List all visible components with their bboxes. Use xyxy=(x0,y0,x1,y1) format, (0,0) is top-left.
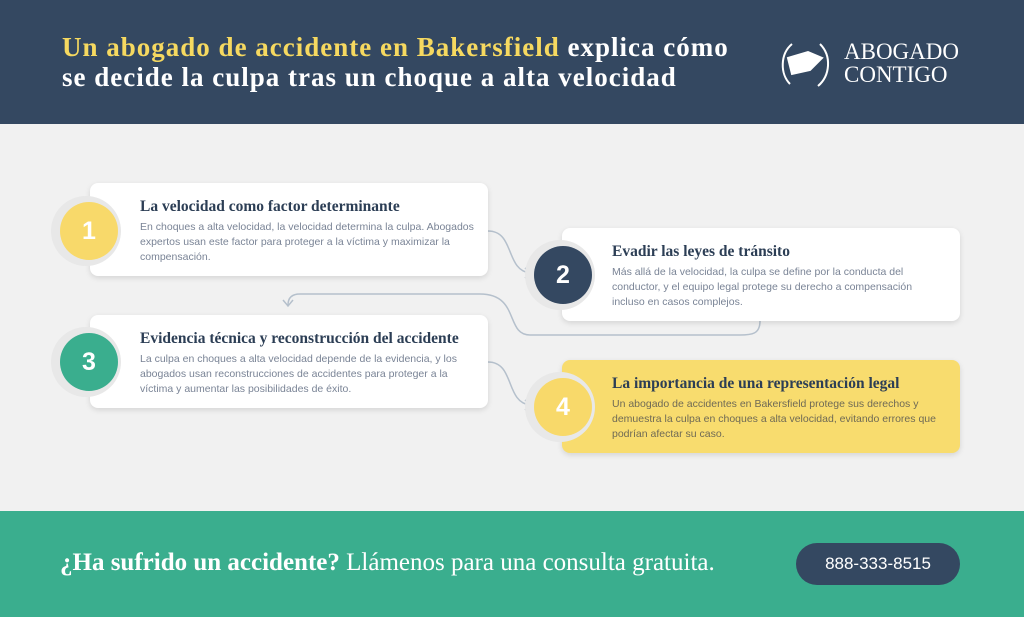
card 3: La culpa en choques a alta velocidad depende de la evidencia, y los abogados usan reconstrucciones de accidentes para proteger a la víctima y aumentar las posibilidades de éxito. xyxy=(140,353,457,395)
title xyxy=(62,32,729,92)
phone button xyxy=(796,543,960,585)
card 3 xyxy=(90,315,488,408)
circle 3 xyxy=(60,333,118,391)
circle 2 xyxy=(534,246,592,304)
footer xyxy=(0,511,1024,617)
header xyxy=(0,0,1024,124)
logo: ABOGADO xyxy=(844,39,959,64)
card 1: En choques a alta velocidad, la velocidad determina la culpa. Abogados expertos usan este factor para proteger a la víctima y maximizar la compensación. xyxy=(140,221,474,263)
circle 1: 1 xyxy=(82,217,96,245)
footer text: ¿Ha sufrido un accidente? Llámenos para una consulta gratuita. xyxy=(60,549,715,576)
card 1: La velocidad como factor determinante xyxy=(140,198,400,215)
circle 2: 2 xyxy=(556,261,570,289)
circle 3: 3 xyxy=(82,348,96,376)
card 4 xyxy=(562,360,960,453)
phone button: 888-333-8515 xyxy=(825,554,931,573)
logo: CONTIGO xyxy=(844,62,948,87)
card 2 xyxy=(562,228,960,321)
card 4: La importancia de una representación legal xyxy=(612,375,899,392)
circle 4: 4 xyxy=(556,393,570,421)
title: se decide la culpa tras un choque a alta velocidad xyxy=(62,62,677,92)
circle 4 xyxy=(534,378,592,436)
card 2: Evadir las leyes de tránsito xyxy=(612,243,790,260)
card 2: Más allá de la velocidad, la culpa se define por la conducta del conductor, y el equipo legal protege su derecho a compensación incluso en casos complejos. xyxy=(612,266,912,308)
logo xyxy=(782,39,959,87)
circle 1 xyxy=(60,202,118,260)
card 1 xyxy=(90,183,488,276)
card 3: Evidencia técnica y reconstrucción del accidente xyxy=(140,330,459,347)
title: Un abogado de accidente en Bakersfield explica cómo xyxy=(62,32,729,62)
card 4: Un abogado de accidentes en Bakersfield protege sus derechos y demuestra la culpa en choques a alta velocidad, evitando errores que podrían afectar su caso. xyxy=(612,398,936,440)
